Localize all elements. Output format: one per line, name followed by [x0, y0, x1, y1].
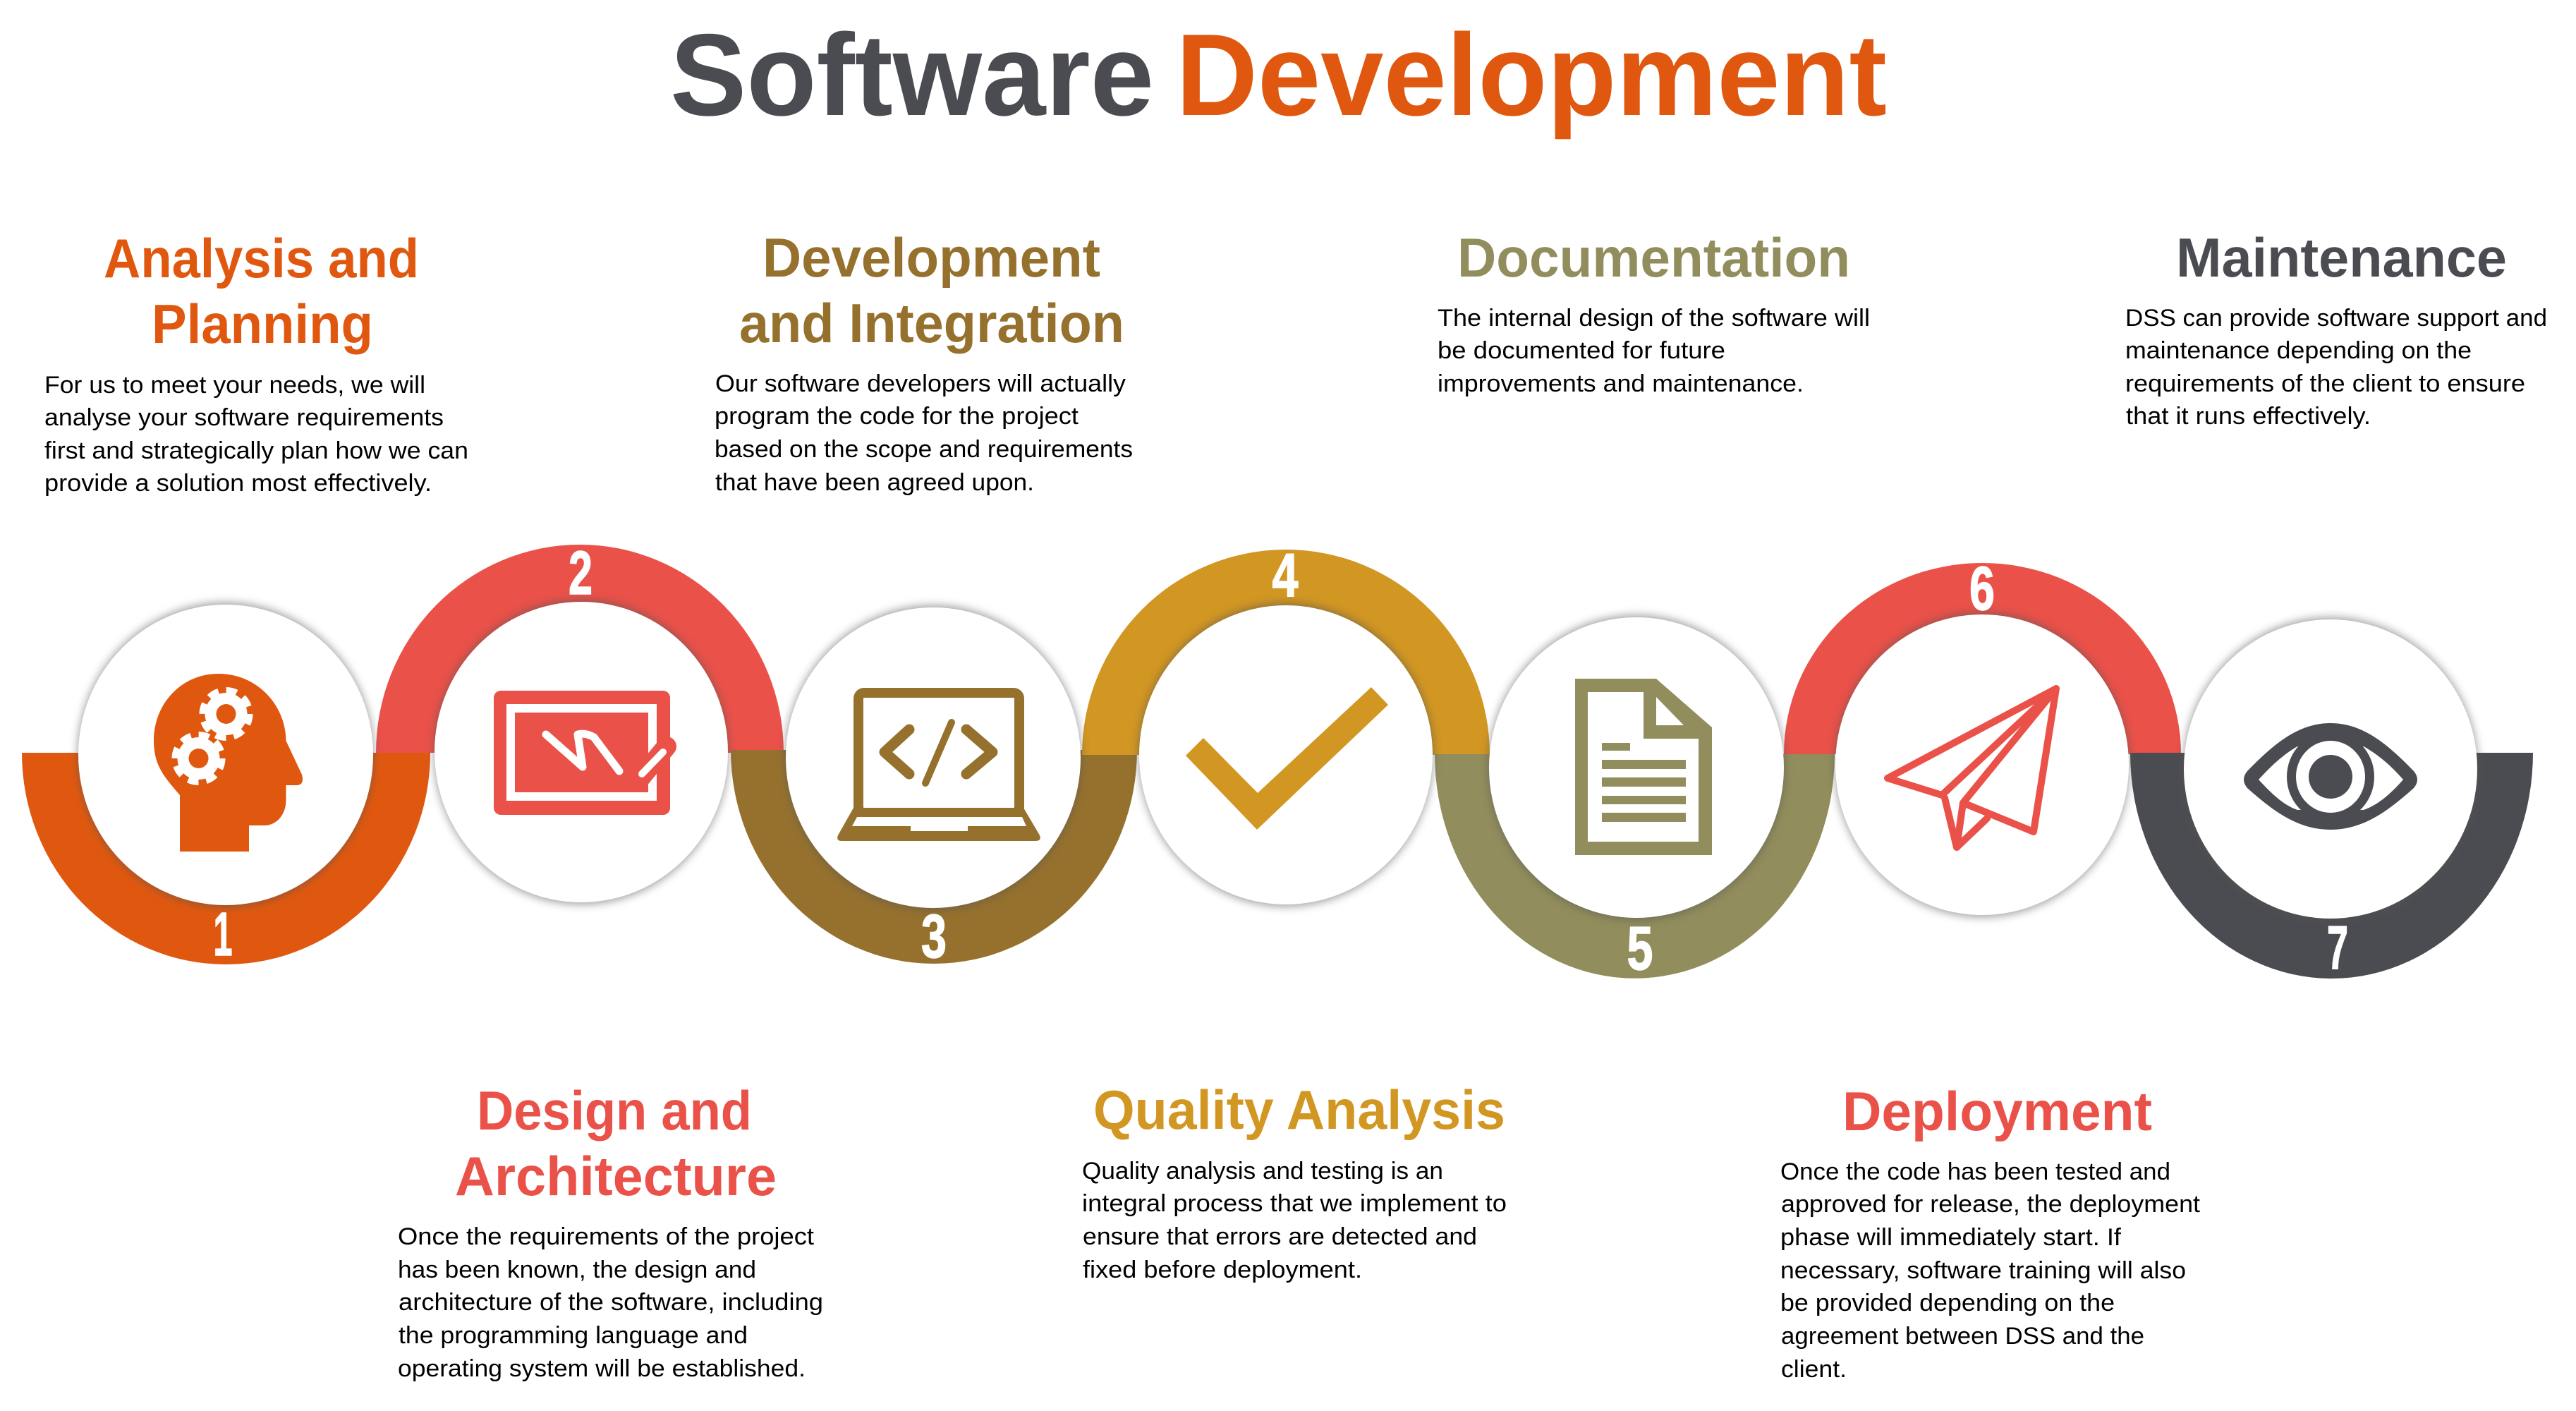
arc: step 3 [731, 750, 1137, 964]
title: Development [1176, 10, 1887, 140]
icon: head with gears [154, 674, 303, 852]
number 1: 1 [213, 900, 233, 969]
text block: maintenance: DSS can provide software support and [2125, 305, 2547, 332]
text block: deployment [1780, 1158, 2201, 1383]
text block: documentation: be documented for future [1438, 337, 1725, 364]
text block: documentation: The internal design of the software will [1438, 305, 1870, 332]
panel: step 3 development and integration [715, 226, 1133, 496]
icon: paper plane [1888, 689, 2056, 847]
text block: maintenance: maintenance depending on the [2125, 337, 2472, 364]
arc: step 4 [1082, 550, 1490, 755]
arc: step 1 [22, 753, 430, 964]
text block: documentation [1438, 305, 1870, 397]
text block: documentation: improvements and maintenance. [1438, 370, 1804, 397]
text block: analysis and planning [44, 372, 468, 497]
text block: quality analysis: integral process that we implement to [1082, 1190, 1507, 1217]
text block: quality analysis: fixed before deployment. [1083, 1256, 1362, 1283]
text block: analysis and planning: For us to meet your needs, we will [44, 372, 425, 399]
node: step 4 circle with check icon [1138, 603, 1433, 907]
title [670, 10, 1887, 140]
text block: deployment: be provided depending on the [1780, 1290, 2115, 1316]
node: step 5 circle with document icon [1488, 615, 1785, 920]
heading: design and architecture [455, 1079, 777, 1207]
text block: design and architecture: the programming language and [399, 1322, 748, 1349]
node: step 7 circle with eye icon [2183, 617, 2478, 921]
heading: design and architecture: Design and [477, 1079, 752, 1141]
node: step 6 circle with paper plane icon [1835, 612, 2130, 917]
heading: maintenance: Maintenance [2176, 226, 2507, 289]
heading: deployment: Deployment [1842, 1080, 2152, 1142]
node: step 1 circle with head icon [78, 602, 374, 907]
icon: whiteboard [494, 691, 670, 815]
number 6: 6 [1969, 555, 1995, 623]
text block: design and architecture [398, 1223, 823, 1382]
panel: step 5 documentation [1438, 226, 1870, 397]
text block: maintenance [2125, 305, 2547, 430]
text block: analysis and planning: provide a solution most effectively. [44, 470, 432, 497]
text block: development and integration: that have been agreed upon. [715, 469, 1034, 496]
text block: analysis and planning: first and strategically plan how we can [44, 437, 468, 464]
heading: development and integration: Development [763, 226, 1100, 289]
heading: quality analysis: Quality Analysis [1093, 1079, 1505, 1141]
arc: step 5 [1435, 754, 1835, 979]
arc: step 6 [1784, 563, 2181, 754]
panel: step 7 maintenance [2125, 226, 2547, 430]
panel: step 6 deployment [1780, 1080, 2201, 1383]
text block: deployment: client. [1781, 1356, 1847, 1383]
number 4: 4 [1272, 541, 1298, 610]
text block: design and architecture: has been known, the design and [398, 1256, 756, 1283]
arc: step 7 [2130, 753, 2533, 979]
number 2: 2 [569, 539, 593, 607]
number 5: 5 [1627, 914, 1653, 983]
text block: maintenance: that it runs effectively. [2126, 403, 2371, 430]
heading: analysis and planning: Planning [152, 293, 373, 355]
text block: development and integration [715, 370, 1133, 496]
text block: design and architecture: architecture of the software, including [399, 1289, 823, 1316]
text block: deployment: necessary, software training will also [1780, 1257, 2186, 1284]
text block: analysis and planning: analyse your software requirements [44, 404, 444, 431]
number 7: 7 [2327, 914, 2348, 982]
text block: deployment: phase will immediately start. If [1780, 1224, 2122, 1251]
heading: development and integration: and Integration [739, 292, 1124, 354]
icon: eye [2244, 723, 2417, 830]
panel: step 1 analysis and planning [44, 227, 468, 497]
text block: maintenance: requirements of the client to ensure [2125, 370, 2525, 397]
heading: analysis and planning: Analysis and [104, 227, 419, 289]
text block: deployment: Once the code has been tested and [1780, 1158, 2170, 1185]
title: Software [670, 10, 1154, 140]
text block: development and integration: program the code for the project [715, 403, 1079, 430]
panel: step 2 design and architecture [398, 1079, 823, 1382]
node: step 2 circle with whiteboard icon [434, 600, 729, 904]
heading: development and integration [739, 226, 1124, 354]
heading: documentation: Documentation [1457, 226, 1850, 289]
node: step 3 circle with laptop code icon [785, 605, 1081, 910]
heading: design and architecture: Architecture [455, 1145, 777, 1207]
icon: laptop code [837, 693, 1040, 841]
text block: design and architecture: operating system will be established. [398, 1355, 806, 1382]
text block: quality analysis [1082, 1158, 1507, 1283]
text block: quality analysis: ensure that errors are detected and [1083, 1223, 1477, 1250]
heading: analysis and planning [104, 227, 419, 355]
text block: deployment: approved for release, the deployment [1781, 1191, 2201, 1218]
text block: quality analysis: Quality analysis and testing is an [1082, 1158, 1443, 1185]
text block: design and architecture: Once the requirements of the project [398, 1223, 815, 1250]
panel: step 4 quality analysis [1082, 1079, 1507, 1283]
number 3: 3 [921, 902, 947, 971]
text block: development and integration: Our software developers will actually [715, 370, 1126, 397]
icon: document [1575, 679, 1712, 855]
arc: step 2 [376, 545, 784, 753]
text block: development and integration: based on the scope and requirements [715, 436, 1133, 463]
text block: deployment: agreement between DSS and the [1781, 1323, 2144, 1350]
icon: check mark [1186, 687, 1388, 830]
